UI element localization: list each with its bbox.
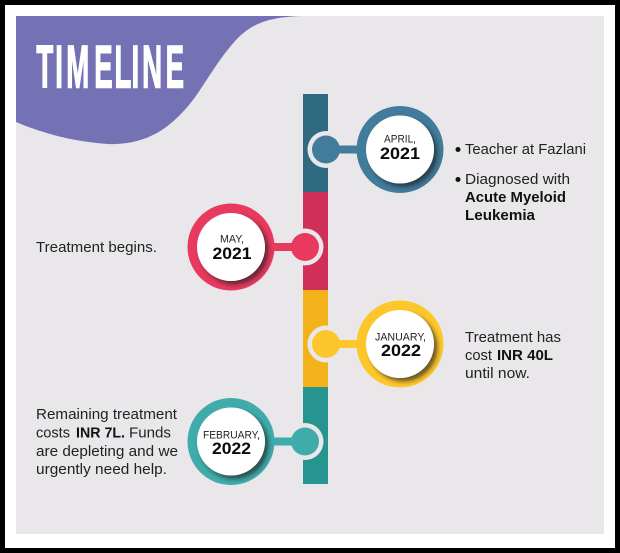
milestone: January 2022: JANUARY, [375, 332, 426, 344]
text: February details: urgently need help. [36, 461, 167, 478]
text: February details: Remaining treatment [36, 406, 178, 423]
milestone: January 2022: 2022 [381, 341, 421, 360]
text: January details: Treatment has [465, 329, 561, 346]
milestone: February 2022 [188, 398, 324, 485]
header blob [16, 16, 302, 144]
text: January details: cost [465, 347, 493, 364]
text: January details: INR 40L [497, 347, 553, 364]
text: April details [456, 141, 586, 224]
milestone: April 2021: 2021 [380, 144, 420, 163]
text: February details: are depleting and we [36, 443, 178, 460]
text: April details: Diagnosed with [465, 171, 570, 188]
milestone: April 2021: APRIL, [384, 134, 416, 146]
milestone: January 2022 [308, 300, 444, 388]
milestone: May 2021: 2021 [212, 244, 252, 263]
milestone: May 2021 [188, 204, 324, 290]
text: February details [36, 406, 178, 478]
milestone: February 2022: 2022 [212, 439, 251, 458]
timeline bar [303, 94, 328, 484]
text: February details: Funds [129, 424, 171, 442]
milestone: May 2021: MAY, [220, 234, 244, 246]
text: February details: INR 7L. [76, 424, 125, 442]
text: April details: Acute Myeloid [465, 189, 566, 206]
text: April details: Leukemia [465, 207, 536, 224]
title: TIMELINE [36, 34, 184, 100]
milestone: April 2021 [308, 106, 444, 193]
text: January details: until now. [465, 365, 530, 382]
text: April details: Teacher at Fazlani [465, 141, 586, 158]
text: February details: costs [36, 424, 70, 442]
milestone: February 2022: FEBRUARY, [203, 430, 260, 442]
text: January details [465, 329, 561, 382]
text: May details: Treatment begins. [36, 239, 157, 256]
